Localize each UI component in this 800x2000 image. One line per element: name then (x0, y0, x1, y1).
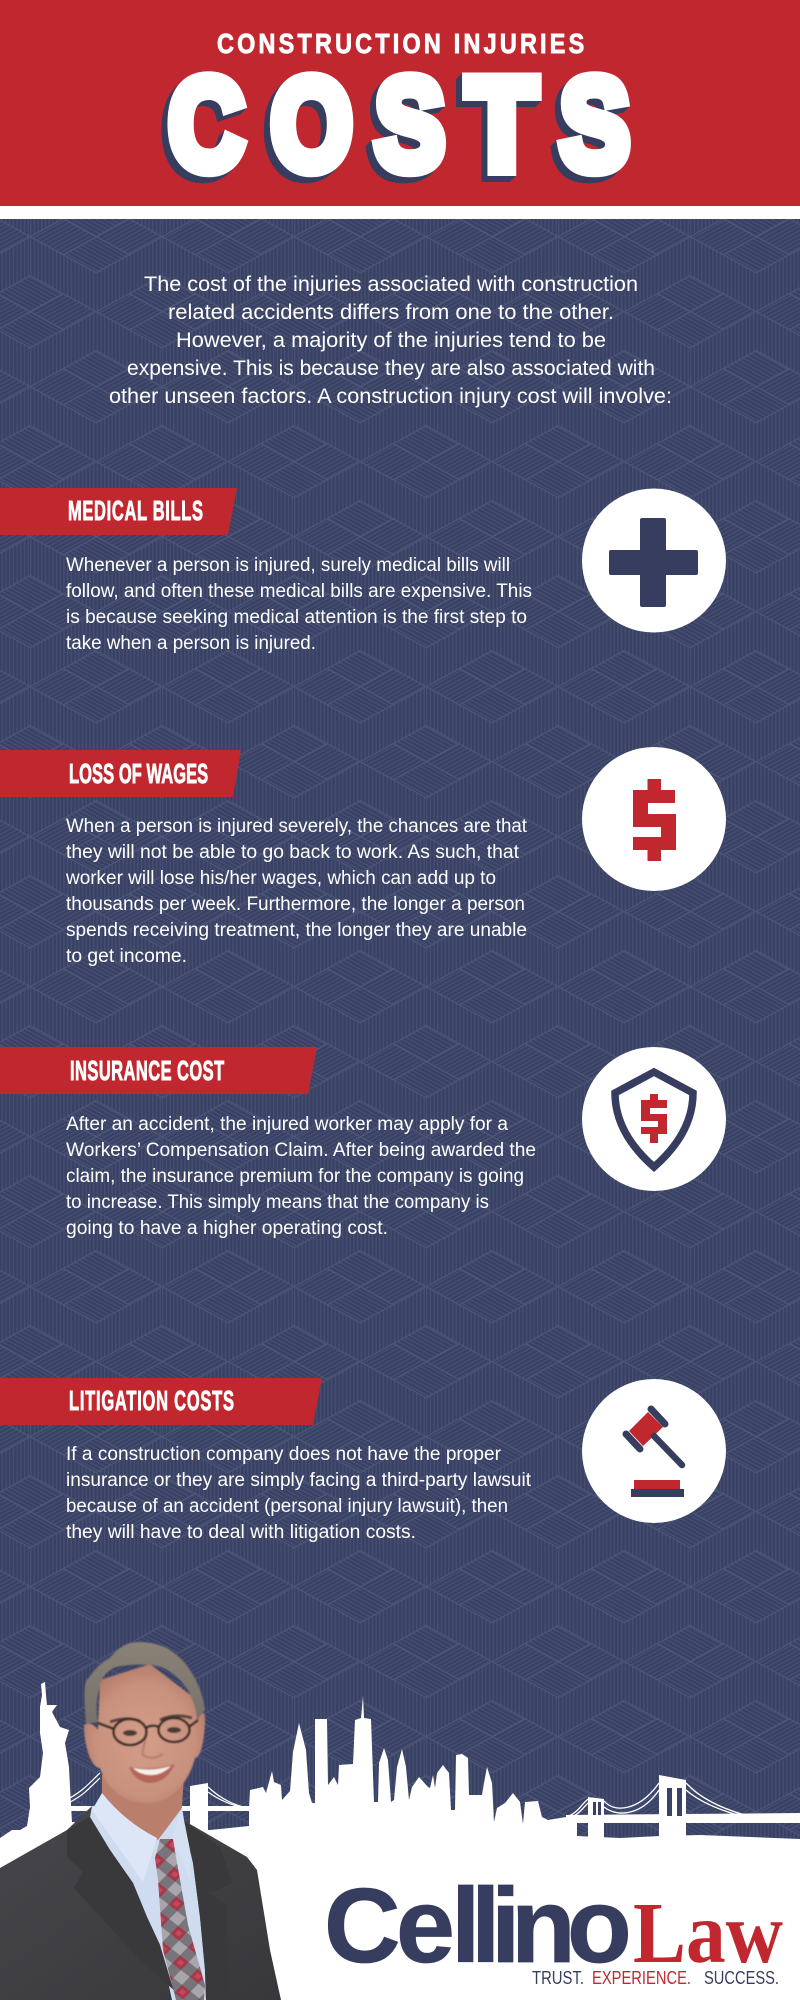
suit (0, 1806, 281, 2000)
banner: insurance cost (0, 1047, 317, 1094)
text: insurance cost: to increase. This simply means that the company is (66, 1192, 489, 1213)
portrait of attorney (0, 1642, 281, 2000)
text: loss of wages: When a person is injured severely, the chances are that (66, 816, 528, 837)
text: insurance cost: After an accident, the injured worker may apply for a (66, 1114, 508, 1135)
logo word: Law: Law (633, 1884, 783, 1981)
icon: dollar sign (582, 747, 726, 891)
tagline (532, 1967, 779, 1988)
panel: medical bills (0, 488, 726, 654)
intro paragraph: The cost of the injuries associated with construction (144, 273, 638, 296)
left bridge (68, 1773, 250, 1830)
eyes (123, 1730, 137, 1736)
tagline: SUCCESS. (704, 1967, 779, 1988)
intro paragraph (109, 273, 672, 408)
text: medical bills: Whenever a person is injured, surely medical bills will (66, 555, 510, 576)
icon: medical plus (582, 488, 726, 632)
icon: shield with dollar (582, 1047, 726, 1191)
mouth (129, 1764, 175, 1783)
tagline: EXPERIENCE. (592, 1967, 691, 1988)
text: litigation costs: they will have to deal with litigation costs. (66, 1522, 416, 1543)
text: medical bills: take when a person is injured. (66, 633, 316, 654)
text: loss of wages: worker will lose his/her wages, which can add up to (65, 868, 496, 889)
head (84, 1642, 205, 1803)
logo: Cellino Law (324, 1867, 783, 1988)
title line: construction injuries: CONSTRUCTION INJURIES (217, 29, 584, 59)
glasses (98, 1718, 198, 1745)
text: insurance cost: Workers’ Compensation Claim. After being awarded the (66, 1140, 536, 1161)
intro paragraph: expensive. This is because they are also associated with (127, 357, 655, 380)
shirt (90, 1806, 206, 2000)
necktie (155, 1839, 205, 2000)
text: litigation costs: If a construction company does not have the proper (66, 1444, 502, 1465)
panel: insurance cost (0, 1047, 726, 1239)
text: litigation costs (66, 1444, 532, 1543)
hair (84, 1642, 205, 1724)
text: medical bills: is because seeking medical attention is the first step to (66, 607, 527, 628)
panel: litigation costs (0, 1378, 726, 1543)
banner: insurance cost: INSURANCE COST (70, 1055, 224, 1086)
intro paragraph: other unseen factors. A construction injury cost will involve: (109, 385, 672, 408)
text: insurance cost: claim, the insurance premium for the company is going (66, 1166, 524, 1187)
intro paragraph: related accidents differs from one to the other. (168, 301, 614, 324)
title word: costs: S (560, 51, 629, 197)
text: insurance cost (66, 1114, 536, 1239)
banner: medical bills (0, 488, 237, 535)
eyebrows (110, 1716, 192, 1722)
text: medical bills: follow, and often these medical bills are expensive. This (66, 581, 532, 602)
text: litigation costs: because of an accident (personal injury lawsuit), then (66, 1496, 508, 1517)
title word: costs (169, 51, 629, 197)
text: loss of wages: thousands per week. Furthermore, the longer a person (66, 894, 525, 915)
text: loss of wages (65, 816, 528, 967)
right bridge (566, 1775, 800, 1840)
logo word: Cellino: Cellino (324, 1867, 632, 1985)
text: medical bills (66, 555, 532, 654)
title word: costs: COS (169, 51, 445, 197)
lapels (67, 1817, 232, 2000)
text: loss of wages: spends receiving treatment, the longer they are unable (66, 920, 527, 941)
banner: loss of wages: LOSS OF WAGES (69, 758, 208, 789)
text: loss of wages: to get income. (66, 946, 187, 967)
title word: costs: T (467, 51, 537, 197)
text: loss of wages: they will not be able to go back to work. As such, that (66, 842, 520, 863)
collar (92, 1793, 157, 1882)
icon: gavel (582, 1379, 726, 1523)
footer: city skyline (0, 1682, 800, 2000)
text: insurance cost: going to have a higher operating cost. (66, 1218, 388, 1239)
intro paragraph: However, a majority of the injuries tend to be (176, 329, 606, 352)
banner: litigation costs: LITIGATION COSTS (69, 1385, 234, 1416)
neck (102, 1775, 184, 1840)
banner: medical bills: MEDICAL BILLS (68, 495, 203, 526)
panel: loss of wages (0, 747, 726, 967)
tagline: TRUST. (532, 1967, 584, 1988)
text: litigation costs: insurance or they are simply facing a third-party lawsuit (66, 1470, 532, 1491)
nose shade (143, 1730, 163, 1758)
banner: loss of wages (0, 750, 241, 797)
header panel (0, 0, 800, 219)
banner: litigation costs (0, 1378, 322, 1425)
